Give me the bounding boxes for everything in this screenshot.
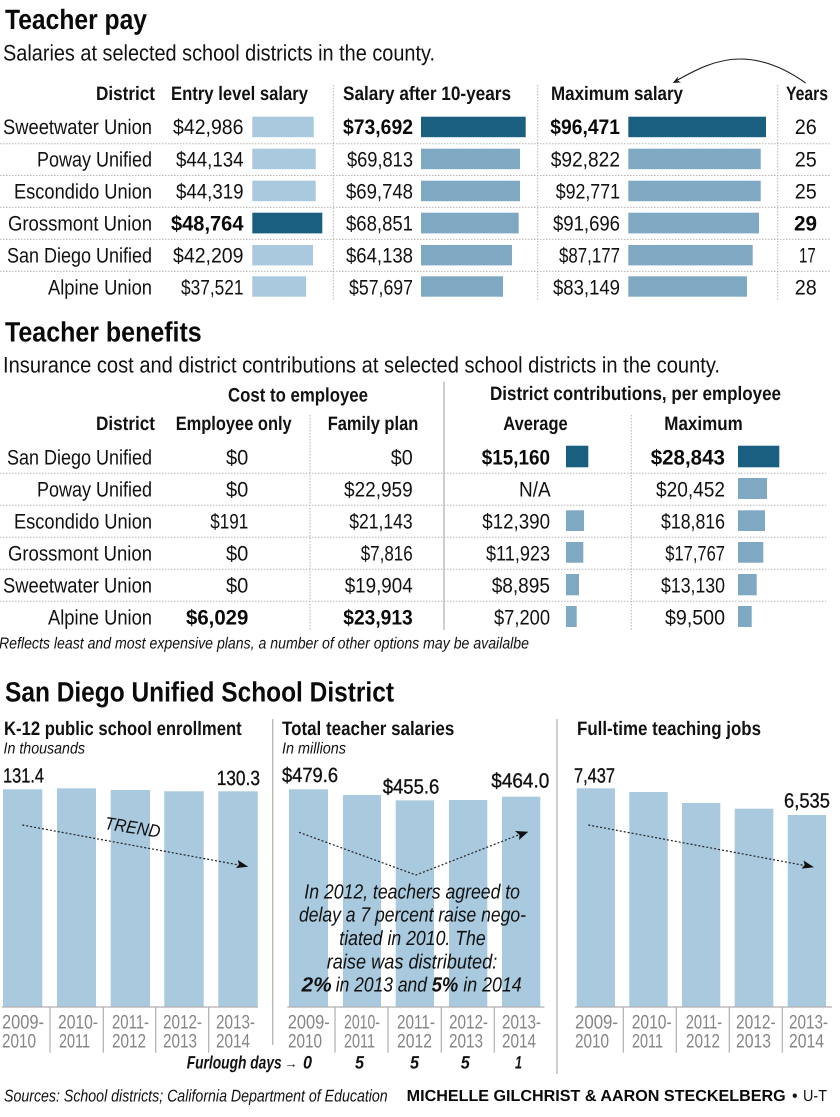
row: Sweetwater Union: 26 <box>795 116 817 139</box>
furlough days row <box>187 1052 522 1072</box>
callout: raise delay <box>299 880 526 997</box>
row: Grossmont Union: $17,767 <box>665 542 725 565</box>
axis: salaries <box>287 1007 544 1053</box>
arrow: salaries trend down then up <box>299 831 528 875</box>
row: San Diego Unified: $42,209 <box>173 245 244 268</box>
table header: teacher pay: Maximum salary <box>551 83 683 105</box>
table header: teacher pay: District <box>96 83 155 105</box>
axis: enrollment: 2010- <box>58 1011 98 1033</box>
arrow: enrollment trend <box>22 825 248 868</box>
row: Alpine Union: $9,500 <box>665 606 725 629</box>
heading: San Diego Unified School District: San Diego Unified School District <box>5 677 394 708</box>
chart title: teaching jobs: Full-time teaching jobs <box>577 718 761 740</box>
axis: teaching jobs <box>575 1007 832 1053</box>
row: Grossmont Union: Grossmont Union <box>8 213 152 236</box>
furlough days row: 1 <box>515 1052 522 1072</box>
row: Poway Unified <box>37 148 817 172</box>
axis: salaries: 2014 <box>502 1031 536 1053</box>
row: Grossmont Union: 29 <box>794 213 817 236</box>
axis: enrollment: 2010 <box>2 1031 36 1053</box>
row: Sweetwater Union: Sweetwater Union <box>3 574 152 597</box>
credit: U-T <box>803 1088 827 1105</box>
row: San Diego Unified <box>7 245 816 268</box>
chart: K-12 public school enrollment <box>2 718 260 1053</box>
row: Grossmont Union: $68,851 <box>346 213 413 236</box>
row: Sweetwater Union: $8,895 <box>492 574 550 597</box>
row: San Diego Unified: $64,138 <box>346 245 413 268</box>
row: Alpine Union <box>48 276 817 300</box>
callout: raise delay: in 2014 <box>463 974 522 997</box>
panel: teacher pay <box>0 4 830 300</box>
row: Sweetwater Union: $73,692 <box>343 116 413 139</box>
chart: total teacher salaries <box>187 718 549 1072</box>
axis: teaching jobs: 2009- <box>575 1011 618 1033</box>
row: Escondido Union: Escondido Union <box>14 510 152 533</box>
row: Poway Unified: $69,813 <box>347 148 413 172</box>
axis: teaching jobs: 2014 <box>789 1031 824 1053</box>
label: trend: TREND <box>103 813 162 842</box>
axis: enrollment: 2013 <box>163 1031 197 1053</box>
axis: salaries: 2011 <box>344 1031 375 1053</box>
row: San Diego Unified: San Diego Unified <box>7 446 152 469</box>
row: Poway Unified: $20,452 <box>656 479 725 502</box>
axis: enrollment: 2013- <box>216 1011 255 1033</box>
row: Alpine Union: $23,913 <box>343 606 413 629</box>
value labels: salaries: $479.6 <box>282 764 338 787</box>
row: Escondido Union: $44,319 <box>176 181 244 204</box>
row: Alpine Union: $83,149 <box>553 277 620 300</box>
axis: salaries: 2009- <box>288 1011 330 1033</box>
table header: teacher benefits: District contributions, per employee <box>490 383 781 405</box>
bars: enrollment <box>3 788 258 1007</box>
row: Grossmont Union: Grossmont Union <box>8 542 152 565</box>
row: Poway Unified: $22,959 <box>344 479 413 502</box>
chart unit: in millions: In millions <box>282 740 346 757</box>
axis: enrollment: 2014 <box>216 1031 250 1053</box>
row: Escondido Union: $69,748 <box>346 181 413 204</box>
axis: salaries: 2013 <box>449 1031 483 1053</box>
row: Poway Unified: Poway Unified <box>37 479 152 502</box>
row: Escondido Union: $18,816 <box>661 510 725 533</box>
row: Escondido Union: $12,390 <box>482 510 550 533</box>
value labels: salaries: $464.0 <box>491 769 549 792</box>
furlough days row: Furlough days <box>187 1052 282 1072</box>
row: Grossmont Union: $48,764 <box>171 213 244 236</box>
row: Sweetwater Union: $13,130 <box>661 574 725 597</box>
row: Poway Unified: $92,822 <box>551 148 620 172</box>
furlough days row: 5 <box>461 1052 471 1072</box>
row: Poway Unified: Poway Unified <box>37 148 152 172</box>
table header: teacher pay <box>96 83 828 105</box>
chart: full-time teaching jobs <box>574 718 832 1053</box>
axis: enrollment <box>2 1007 258 1053</box>
row: Alpine Union: $57,697 <box>349 277 413 300</box>
table header: teacher benefits: Employee only <box>176 413 292 435</box>
credit: • <box>792 1088 798 1105</box>
chart title: enrollment: K-12 public school enrollment <box>4 718 242 740</box>
value labels: enrollment: 130.3 <box>217 767 260 790</box>
panel: San Diego Unified School District <box>2 677 832 1074</box>
row: Sweetwater Union: Sweetwater Union <box>3 116 152 139</box>
row: Alpine Union: Alpine Union <box>48 277 152 300</box>
table header: teacher benefits: District <box>96 413 155 435</box>
row: Alpine Union: $37,521 <box>181 277 244 300</box>
row: Poway Unified: N/A <box>519 479 551 502</box>
row: Escondido Union: Escondido Union <box>14 181 152 204</box>
row: Alpine Union: Alpine Union <box>48 606 152 629</box>
row: Escondido Union: $191 <box>210 510 248 533</box>
value labels: teaching jobs: 6,535 <box>784 789 830 812</box>
credit: MICHELLE GILCHRIST & AARON STECKELBERG <box>407 1088 786 1105</box>
furlough days row: 0 <box>303 1052 312 1072</box>
row: San Diego Unified <box>7 446 779 469</box>
table header: teacher benefits: Cost to employee <box>228 385 368 407</box>
axis: teaching jobs: 2013 <box>736 1031 771 1053</box>
heading: teacher benefits: Teacher benefits <box>5 317 202 348</box>
row: Escondido Union: 25 <box>795 181 817 204</box>
table header: teacher benefits: Family plan <box>328 413 418 435</box>
axis: salaries: 2012 <box>397 1031 432 1053</box>
row: Sweetwater Union <box>3 116 817 139</box>
value labels: teaching jobs: 7,437 <box>574 765 615 788</box>
table header: teacher benefits: Maximum <box>664 413 743 435</box>
axis: enrollment: 2012 <box>112 1031 146 1053</box>
callout: raise delay: In 2012, teachers agreed to <box>304 880 520 903</box>
value labels: teaching jobs <box>574 765 830 812</box>
chart unit: in thousands: In thousands <box>4 740 85 757</box>
row: Grossmont Union: $0 <box>226 542 248 565</box>
row: Escondido Union <box>14 181 817 204</box>
axis: salaries: 2013- <box>502 1011 541 1033</box>
row: Alpine Union: 28 <box>795 277 817 300</box>
arrow: teaching jobs trend <box>588 825 814 869</box>
row: Grossmont Union: $11,923 <box>486 542 550 565</box>
sources: Sources: School districts; California Department of Education <box>4 1087 388 1106</box>
row: Sweetwater Union <box>3 574 757 597</box>
row: Sweetwater Union: $0 <box>226 574 248 597</box>
row: Grossmont Union <box>8 542 763 565</box>
row: Poway Unified: $0 <box>226 479 248 502</box>
row: Grossmont Union <box>8 213 817 236</box>
row: Grossmont Union: $91,696 <box>553 213 620 236</box>
value labels: salaries: $455.6 <box>383 775 439 798</box>
callout: raise delay: 5% <box>432 974 458 997</box>
table header: teacher benefits <box>96 383 781 435</box>
table header: teacher benefits: Average <box>503 413 568 435</box>
furlough days row: 5 <box>410 1052 420 1072</box>
furlough days row: → <box>284 1055 298 1071</box>
row: San Diego Unified: $87,177 <box>559 245 620 268</box>
axis: enrollment: 2012- <box>163 1011 202 1033</box>
callout: raise delay: tiated in 2010. The <box>339 927 486 950</box>
row: San Diego Unified: $15,160 <box>482 446 550 469</box>
value labels: enrollment <box>3 764 260 790</box>
callout: raise delay: raise was distributed: <box>327 950 497 973</box>
row: San Diego Unified: San Diego Unified <box>7 245 152 268</box>
axis: teaching jobs: 2013- <box>789 1011 828 1033</box>
axis: salaries: 2011- <box>397 1011 435 1033</box>
axis: enrollment: 2009- <box>2 1011 44 1033</box>
bars: salaries <box>289 789 540 1007</box>
row: Grossmont Union: $7,816 <box>361 542 413 565</box>
panel: teacher benefits <box>0 317 826 653</box>
row: Alpine Union <box>48 606 752 629</box>
row: San Diego Unified: 17 <box>799 245 816 268</box>
heading: teacher pay: Teacher pay <box>5 4 147 35</box>
row: Alpine Union: $7,200 <box>494 606 550 629</box>
row: San Diego Unified: $0 <box>226 446 248 469</box>
row: Escondido Union: $21,143 <box>349 510 413 533</box>
table header: teacher pay: Salary after 10-years <box>343 83 511 105</box>
row: Poway Unified: $44,134 <box>176 148 244 172</box>
axis: enrollment: 2011- <box>112 1011 149 1033</box>
table header: teacher pay: Years <box>786 83 828 105</box>
row: Alpine Union: $6,029 <box>186 606 248 629</box>
row: Sweetwater Union: $96,471 <box>550 116 620 139</box>
chart title: salaries: Total teacher salaries <box>282 718 454 740</box>
axis: salaries: 2010 <box>288 1031 322 1053</box>
subtitle: teacher benefits: Insurance cost and district contributions at selected school districts in the county. <box>3 353 720 378</box>
row: Escondido Union: $92,771 <box>556 181 620 204</box>
arrow: years to maximum salary <box>673 59 806 83</box>
axis: teaching jobs: 2011 <box>632 1031 663 1053</box>
axis: enrollment: 2011 <box>59 1031 90 1053</box>
table header: teacher pay: Entry level salary <box>171 83 308 105</box>
axis: teaching jobs: 2011- <box>686 1011 722 1033</box>
axis: teaching jobs: 2010 <box>575 1031 609 1053</box>
row: San Diego Unified: $28,843 <box>651 446 725 469</box>
axis: teaching jobs: 2012- <box>736 1011 776 1033</box>
furlough days row: 5 <box>355 1052 365 1072</box>
row: San Diego Unified: $0 <box>391 446 413 469</box>
row: Escondido Union <box>14 510 765 533</box>
bars: teaching jobs <box>577 788 826 1007</box>
callout: raise delay: in 2013 and <box>336 974 428 997</box>
row: Sweetwater Union: $19,904 <box>345 574 413 597</box>
callout: raise delay: delay a 7 percent raise nego- <box>299 904 526 927</box>
axis: teaching jobs: 2010- <box>632 1011 672 1033</box>
subtitle: teacher pay: Salaries at selected school districts in the county. <box>3 40 435 66</box>
callout: raise delay: 2% <box>301 974 332 997</box>
row: Sweetwater Union: $42,986 <box>173 116 244 139</box>
value labels: salaries <box>282 764 549 798</box>
axis: salaries: 2012- <box>449 1011 488 1033</box>
row: Poway Unified <box>37 478 767 502</box>
value labels: enrollment: 131.4 <box>3 764 44 787</box>
axis: teaching jobs: 2012 <box>686 1031 720 1053</box>
row: Poway Unified: 25 <box>795 148 817 172</box>
footnote: Reflects least and most expensive plans, a number of other options may be availalbe <box>0 636 529 653</box>
axis: salaries: 2010- <box>344 1011 380 1033</box>
